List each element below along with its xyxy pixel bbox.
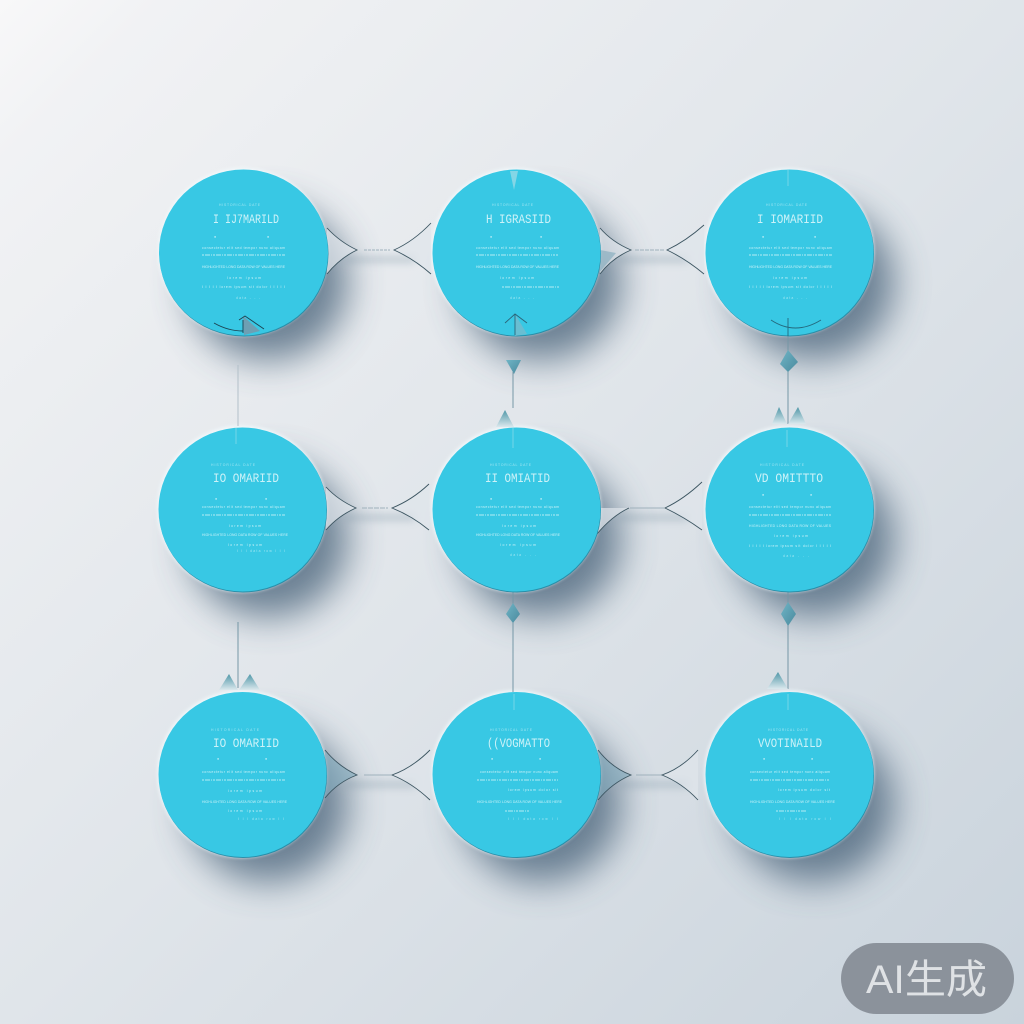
circle 1: I IJ7MARILD [213,213,279,227]
circle 4: lorem ipsum [229,524,261,528]
circle 1: data - - - [236,296,260,300]
circle 5: ■ ■ [490,497,542,501]
circle 2: data - - - [510,296,534,300]
circle 6: ■ ■ [762,493,812,497]
circle 3: consectetur elit sed tempor nunc aliquam [749,246,832,250]
badge: AI generated [841,943,1014,1014]
circle 2 bottom arrow [505,314,527,336]
circle 7: I I I data row I I [238,817,284,821]
circle 9: ■ ■ [763,757,813,761]
circle 3 [706,170,874,336]
connector: row 3, column 2 to 3 [598,750,698,800]
circle 1 [159,170,328,336]
circle 6: lorem ipsum [774,534,808,538]
circle drop shadows [188,204,894,882]
circle 5: consectetur elit sed tempor nunc aliquam [476,505,559,509]
circle 3 top notch [787,170,789,186]
circle 5: data - - - [510,553,536,557]
circle 3: HISTORICAL DATE [766,203,808,207]
circle 1: consectetur elit sed tempor nunc aliquam [202,246,285,250]
circle 2: ■ ■ [490,235,542,239]
circle 3 bottom arc [771,318,821,336]
circle 5 top notch [512,428,514,448]
circle 4: ■ ■ [215,497,267,501]
circle 2: lorem ipsum [500,276,534,280]
circle 6: HIGHLIGHTED LONG DATA ROW OF VALUES [749,524,832,528]
circle 2: H IGRASIID [486,213,551,227]
circle 2 top notch [510,171,518,190]
connector: row 3, column 1 to 2 [325,750,430,800]
circle 2: HIGHLIGHTED LONG DATA ROW OF VALUES HERE [476,265,560,269]
circle 9: HISTORICAL DATE [768,728,809,732]
circle 4 top notch [235,428,237,444]
circle 8 top notch [513,694,515,710]
circle 3: ■ ■ [762,235,816,239]
connector: column 3, row 1 to 2 [772,320,806,424]
circle 8: ■ ■ [491,757,541,761]
circle 4: lorem ipsum [228,543,262,547]
circle 4 [158,428,327,592]
circle 1: HIGHLIGHTED LONG DATA ROW OF VALUES HERE [202,265,286,269]
circle 8: HISTORICAL DATE [490,728,533,732]
circle 6 [706,428,874,592]
circle 2: consectetur elit sed tempor nunc aliquam [476,246,559,250]
circle 6: HISTORICAL DATE [760,463,805,467]
circle 1: lorem ipsum [227,276,261,280]
circle 5: II OMIATID [485,472,550,486]
circle 5: lorem ipsum [500,543,536,547]
circle 7: IO OMARIID [213,737,279,751]
circle 6: data - - - [783,554,809,558]
circle 1 caption: HISTORICAL DATE [219,203,261,207]
circle 5: lorem ipsum [502,524,536,528]
circle 9: lorem ipsum dolor sit [778,788,830,792]
connector: column 2, row 2 to 3 [506,592,520,692]
circle glows [157,168,874,858]
circle 9: consectetur elit sed tempor nunc aliquam [750,770,830,774]
circle 3: I IOMARIID [757,213,823,227]
circle 6: VD OMITTTO [755,472,823,486]
circle 7: ■ ■ [217,757,267,761]
circle 9 [706,692,874,858]
circle 4: consectetur elit sed tempor nunc aliquam [202,505,285,509]
circle 9: HIGHLIGHTED LONG DATA ROW OF VALUES HERE [750,800,836,804]
circle 1: I I I I I lorem ipsum sit dolor I I I I I [202,285,285,289]
circle 4: IO OMARIID [213,472,279,486]
connector: column 1, row 1 to 2 [237,365,239,426]
connector: row 2, column 1 to 2 [326,484,429,530]
circle 9: VVOTINAILD [758,737,822,751]
circle 8: HIGHLIGHTED LONG DATA ROW OF VALUES HERE [477,800,563,804]
circle 1: ■ ■ [214,235,269,239]
connector: column 1, row 2 to 3 [219,622,260,690]
circle 9 top notch [787,694,789,710]
circle 5: HISTORICAL DATE [490,463,532,467]
circle 2 [432,170,601,336]
circle 5: HIGHLIGHTED LONG DATA ROW OF VALUES HERE [476,533,561,537]
circle 7 [158,692,327,858]
connector: row 1, column 1 to 2 [327,223,431,274]
circle 4: HISTORICAL DATE [211,463,256,467]
circle 3: lorem ipsum [773,276,807,280]
connector: row 2, column 2 to 3 [597,482,702,534]
circle 7: HIGHLIGHTED LONG DATA ROW OF VALUES HERE [202,800,288,804]
circle 6: I I I I I lorem ipsum sit dolor I I I I I [749,544,831,548]
circle 3: data - - - [783,296,807,300]
badge: AI generated: AI生成 [866,958,987,1002]
circle 8: consectetur elit sed tempor nunc aliquam [480,770,558,774]
circle 7: consectetur elit sed tempor nunc aliquam [202,770,285,774]
circle 7: HISTORICAL DATE [211,728,260,732]
circle 3: I I I I I lorem ipsum sit dolor I I I I I [749,285,832,289]
circle 6: consectetur elit sed tempor nunc aliquam [749,505,831,509]
connector: column 2, row 1 to 2 [496,360,521,427]
circle 7: lorem ipsum [228,809,262,813]
circle 7: lorem ipsum [228,789,262,793]
circle 6 top notch [786,430,788,447]
circle 3: HIGHLIGHTED LONG DATA ROW OF VALUES HERE [749,265,833,269]
circle 8: ((VOGMATTO [487,737,550,751]
circle 8: I I I data row I I [508,817,558,821]
circle 4: I I I data row I I I [237,549,285,553]
connector line shadows [345,256,688,788]
circle 4: HIGHLIGHTED LONG DATA ROW OF VALUES HERE [202,533,289,537]
circle 1 bottom arrow [214,316,264,335]
circle 5 [432,428,601,592]
circle 2: HISTORICAL DATE [492,203,534,207]
circle 8 [432,692,601,858]
circle 9: I I I data row I I [779,817,831,821]
circle 8: lorem ipsum dolor sit [508,788,558,792]
connector: column 3, row 2 to 3 [767,592,796,689]
connector: row 1, column 2 to 3 [598,225,704,274]
